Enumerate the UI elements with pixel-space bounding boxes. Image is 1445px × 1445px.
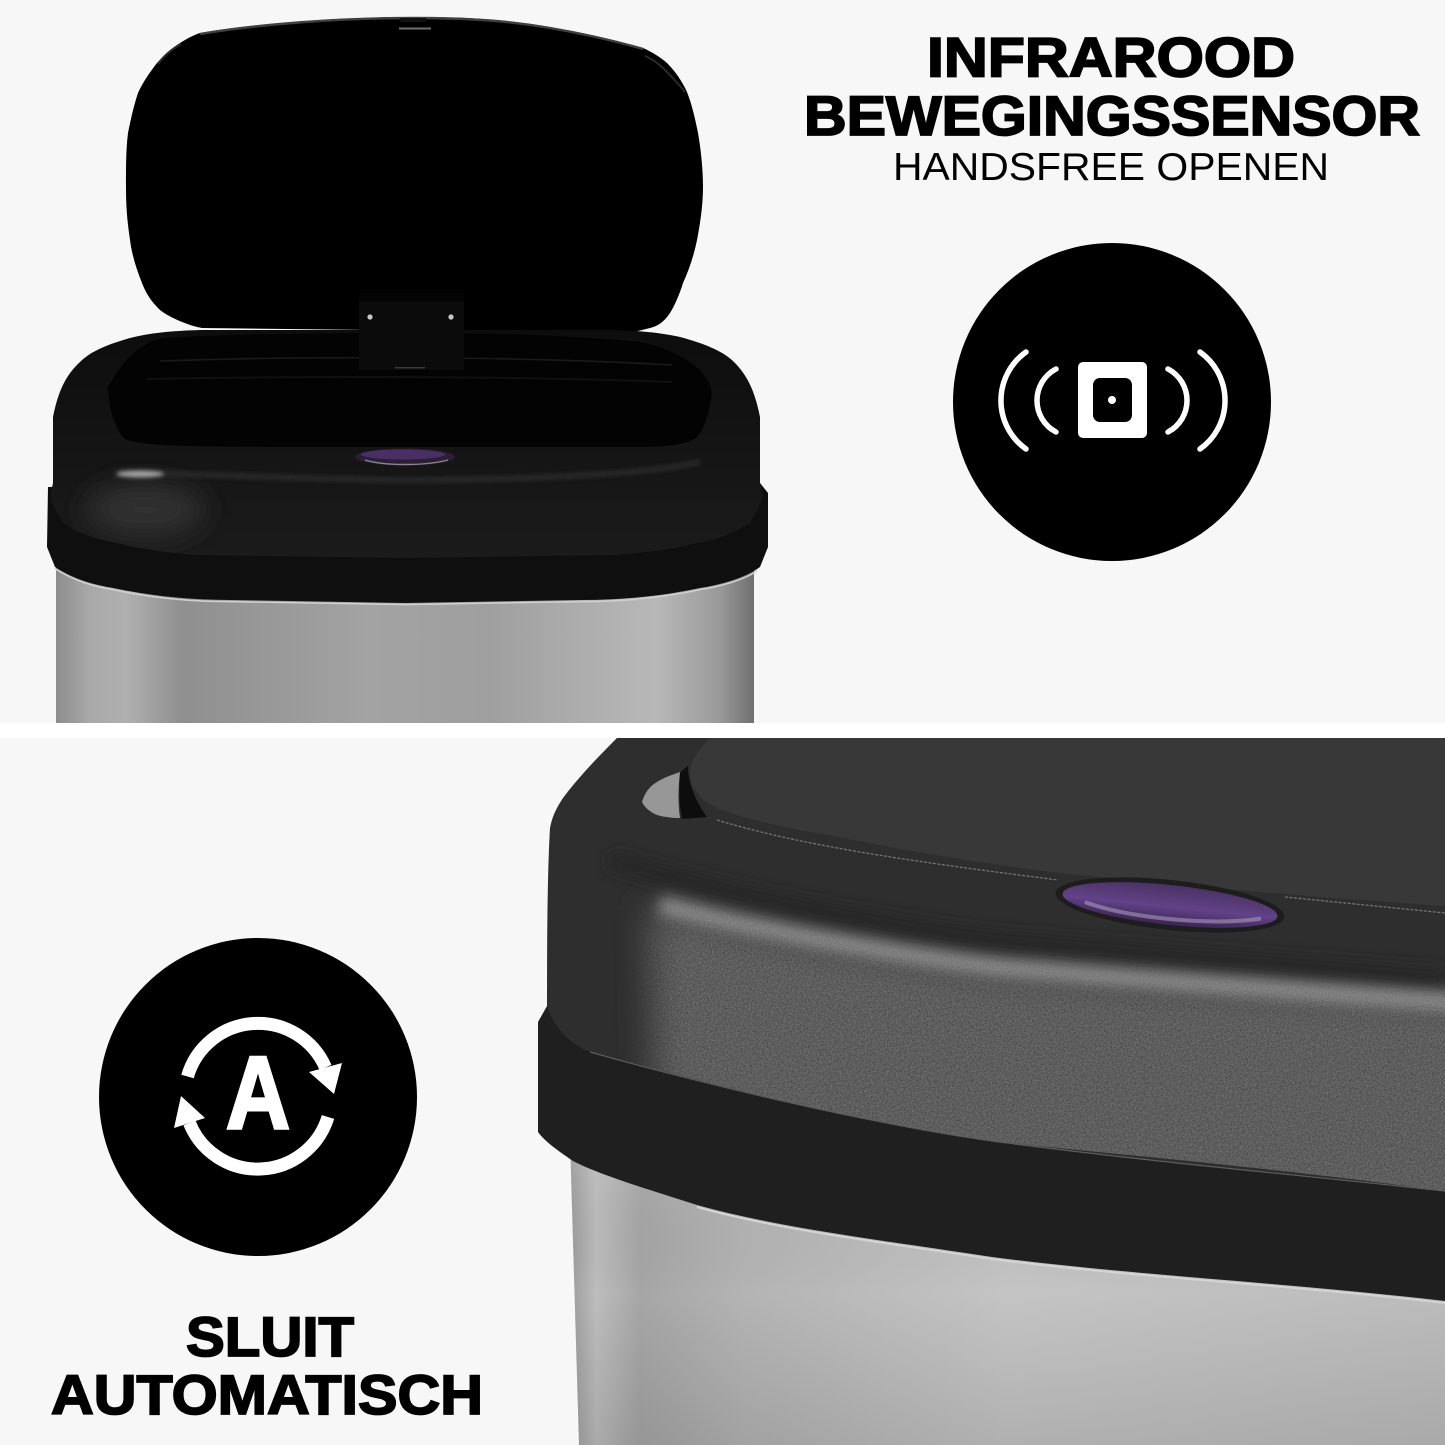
- steel bin body: [570, 1140, 1445, 1445]
- heading: infrared motion sensor: BEWEGINGSSENSOR: [804, 84, 1420, 147]
- heading: closes automatically: AUTOMATISCH: [51, 1363, 483, 1426]
- photo: closed bin close-up: [538, 738, 1445, 1445]
- hinge: [359, 302, 464, 368]
- icon: motion sensor: [953, 243, 1271, 561]
- purple sensor window: [355, 448, 455, 466]
- purple sensor window: [1056, 878, 1284, 932]
- steel bin body: [56, 555, 754, 723]
- rim: [547, 738, 1445, 1188]
- bin opening: [108, 333, 712, 447]
- steel edge highlight: [697, 1207, 1445, 1303]
- textured rim front: [630, 873, 1445, 1190]
- icon: automatic close: A: [226, 1035, 290, 1150]
- photo: open bin with lid: [47, 17, 768, 723]
- icon: automatic close: [99, 938, 417, 1256]
- heading: infrared motion sensor: HANDSFREE OPENEN: [893, 146, 1329, 189]
- black band: [538, 1006, 1445, 1301]
- rim and band: [47, 330, 768, 605]
- heading: infrared motion sensor: [804, 26, 1420, 189]
- heading: closes automatically: SLUIT: [186, 1305, 354, 1368]
- heading: closes automatically: [51, 1305, 483, 1426]
- closed lid: [690, 738, 1445, 906]
- panel: top background: [0, 0, 1445, 723]
- band seam highlight: [590, 1052, 1445, 1191]
- panel: bottom background: [0, 738, 1445, 1445]
- lid seam: [717, 820, 1445, 913]
- open lid: [126, 17, 703, 333]
- heading: infrared motion sensor: INFRAROOD: [927, 26, 1295, 88]
- notch: [642, 766, 707, 819]
